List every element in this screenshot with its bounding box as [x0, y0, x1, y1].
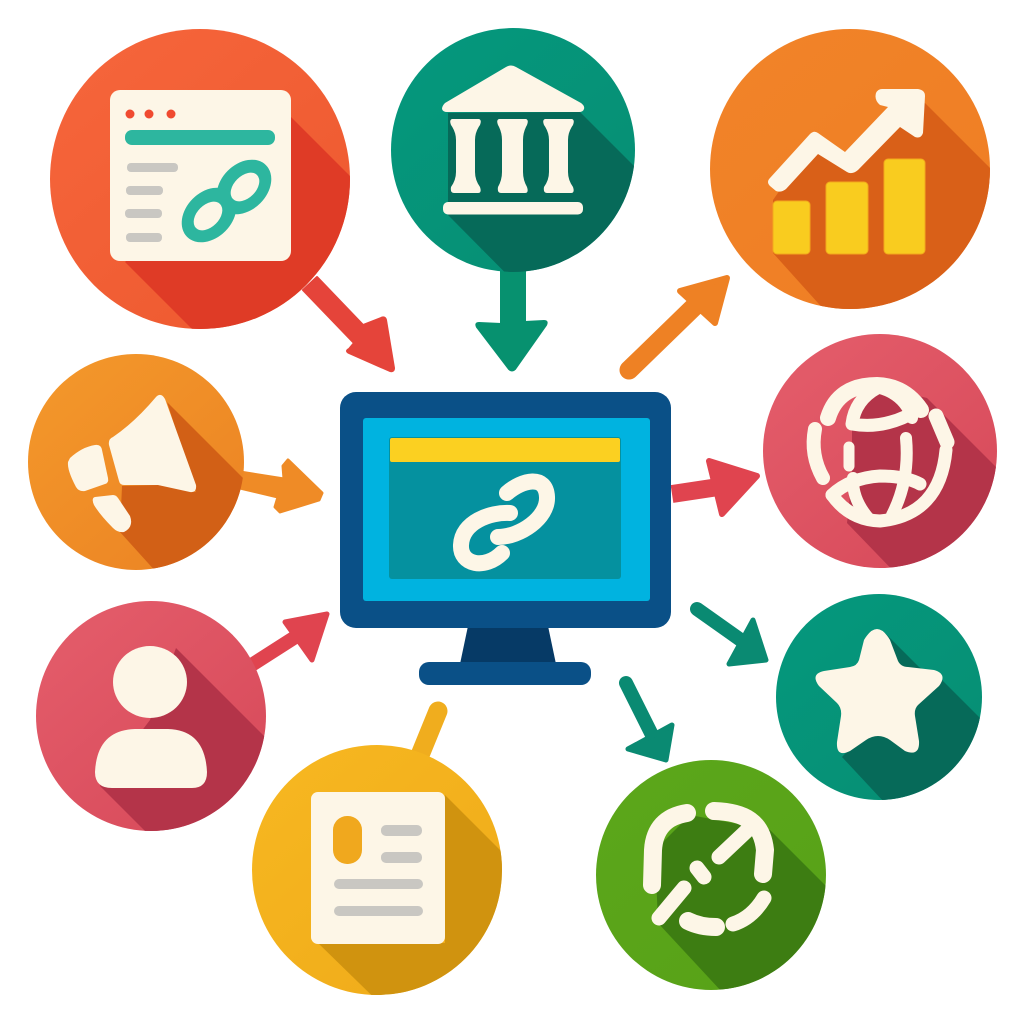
panel: globe circle [763, 334, 997, 568]
panel: institution circle [391, 28, 635, 272]
arrow: monitor to growth chart [629, 278, 727, 370]
panel: user circle [36, 601, 266, 831]
arrow: monitor to globe [672, 461, 757, 514]
icon: broken globe [814, 385, 947, 521]
panel: loop link circle [596, 760, 826, 990]
icon: bar chart with rising arrow [768, 89, 925, 254]
icon: browser window with link [110, 90, 291, 261]
icon: profile document [311, 792, 445, 944]
panel: backlink web page circle [50, 29, 350, 329]
yellow title bar [390, 438, 620, 462]
monitor base [419, 662, 591, 685]
panel: growth chart circle [710, 29, 990, 309]
arrow: backlink page to monitor [303, 277, 394, 371]
panel: star circle [776, 594, 982, 800]
icon: megaphone [68, 395, 196, 532]
icon: classical building [442, 66, 584, 214]
panel: document circle [252, 745, 502, 995]
arrow: monitor to star [697, 609, 766, 664]
monitor stand [460, 626, 556, 664]
monitor frame [340, 392, 671, 628]
arrow: monitor to loop [626, 683, 672, 760]
arrow: user to monitor [250, 614, 327, 666]
inner window [389, 437, 621, 579]
icon: chain link [461, 481, 547, 563]
icon: user silhouette [95, 646, 207, 788]
arrow: institution to monitor [476, 262, 547, 370]
arrow: document to monitor [418, 711, 438, 760]
monitor screen [363, 418, 650, 601]
icon: star [815, 629, 943, 753]
panel: megaphone circle [28, 354, 244, 570]
arrow: megaphone to monitor [240, 460, 322, 512]
icon: broken loop with arrow [652, 811, 765, 927]
panel: central monitor [340, 392, 671, 685]
